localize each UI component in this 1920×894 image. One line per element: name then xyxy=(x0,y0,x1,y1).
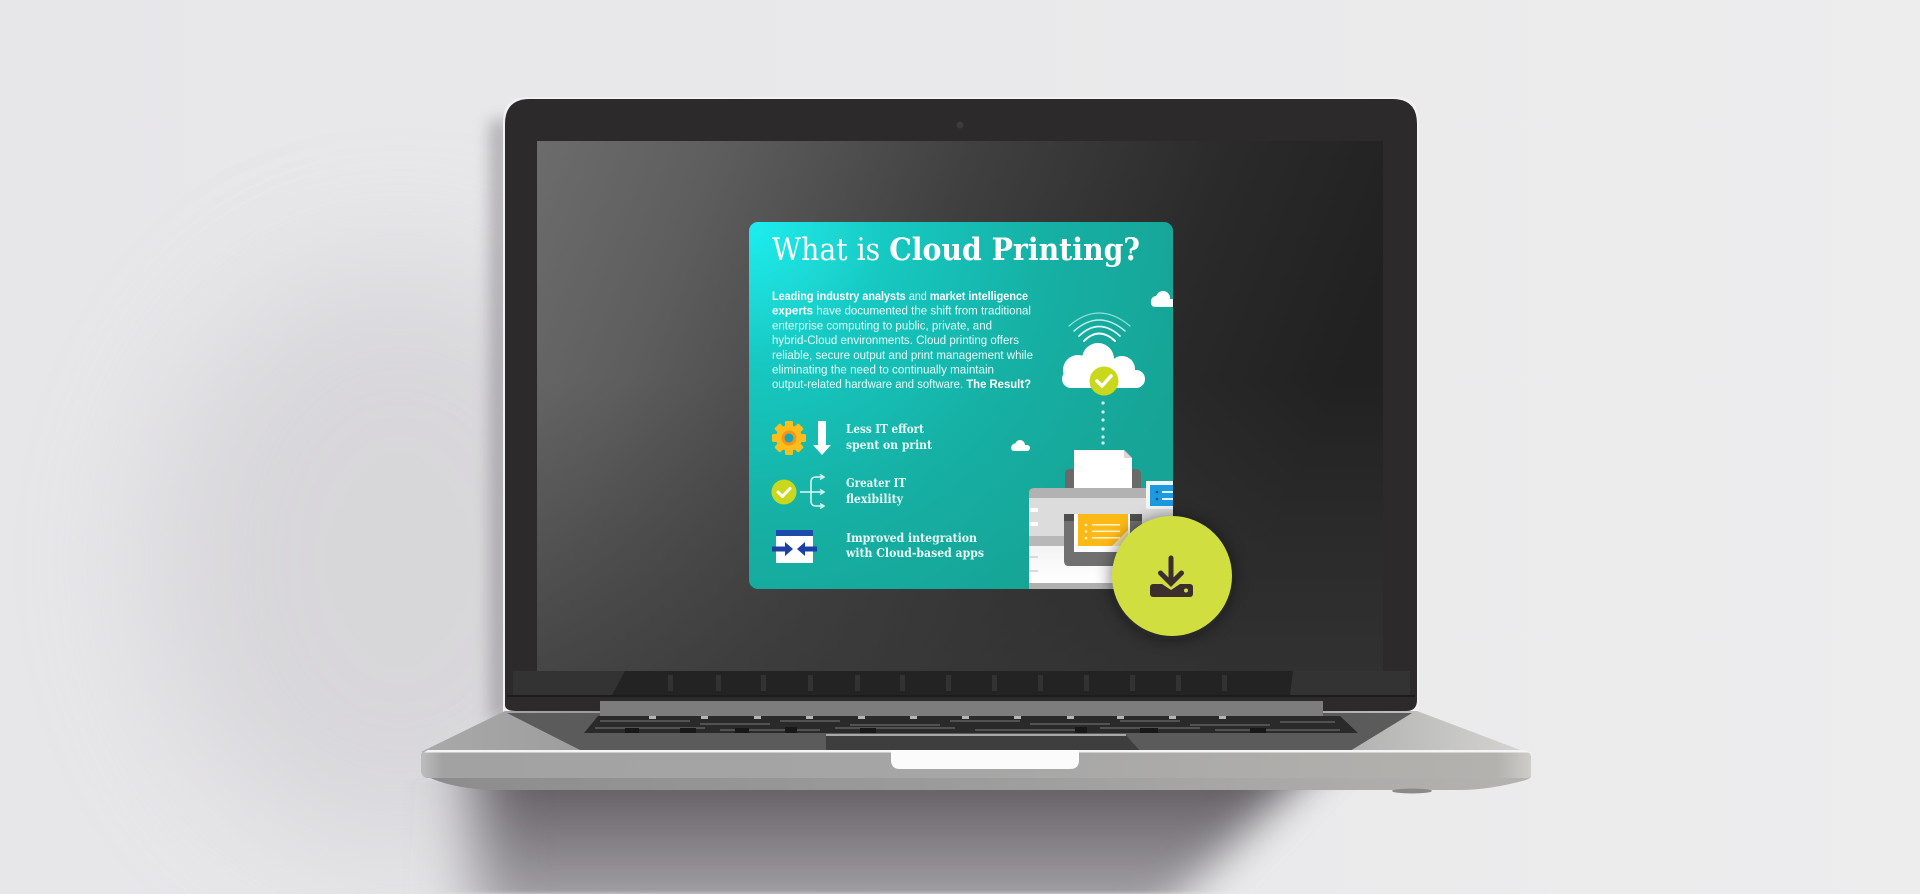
laptop mockup scene xyxy=(120,97,1531,894)
icon: branching arrows xyxy=(800,474,824,508)
webcam xyxy=(956,122,964,128)
paper in tray xyxy=(1074,450,1132,488)
label: flexibility xyxy=(846,491,904,506)
deck xyxy=(421,711,1531,754)
hinge strip xyxy=(600,701,1323,716)
icon: down arrow xyxy=(813,421,831,455)
shadow under laptop xyxy=(475,120,1300,894)
icon: gear xyxy=(772,421,806,455)
benefit: greater flexibility xyxy=(772,474,907,508)
front edge xyxy=(421,750,1531,790)
intro paragraph: experts have documented the shift from traditional xyxy=(772,304,1031,318)
laptop lid xyxy=(503,97,1419,712)
label xyxy=(845,530,984,560)
intro paragraph: output-related hardware and software. The Result? xyxy=(772,377,1031,391)
trackpad notch xyxy=(891,750,1079,769)
intro paragraph: eliminating the need to continually maintain xyxy=(772,362,994,376)
bezel reflection xyxy=(507,671,1415,697)
label: spent on print xyxy=(846,437,932,452)
intro paragraph: hybrid-Cloud environments. Cloud printing offers xyxy=(772,333,1019,347)
icon: printer xyxy=(1029,450,1180,589)
output slot xyxy=(1064,521,1142,566)
title: What is Cloud Printing? xyxy=(772,232,1140,268)
card background xyxy=(749,222,1173,589)
icon: wifi arcs xyxy=(1069,313,1130,341)
button shadow xyxy=(1111,517,1233,639)
blue tag xyxy=(1146,481,1173,509)
button circle xyxy=(1112,516,1232,636)
benefit: cloud integration xyxy=(772,530,984,563)
download button xyxy=(1111,516,1233,639)
label: Less IT effort xyxy=(846,421,924,436)
icon: download into tray xyxy=(1150,558,1193,597)
laptop base xyxy=(421,701,1531,794)
printer body xyxy=(1029,488,1146,498)
keyboard well xyxy=(507,713,1412,751)
laptop xyxy=(421,97,1531,794)
icon: app window with arrows xyxy=(772,530,817,563)
icon: small cloud middle xyxy=(1011,440,1030,451)
screen xyxy=(537,141,1383,671)
label: Greater IT xyxy=(846,475,907,490)
back tray xyxy=(1065,469,1141,488)
trackpad xyxy=(826,734,1140,751)
laptop foot xyxy=(1392,788,1432,794)
label xyxy=(846,421,932,452)
intro paragraph: Leading industry analysts and market intelligence xyxy=(772,289,1028,303)
icon: main cloud xyxy=(1062,343,1145,396)
dotted connector xyxy=(1101,401,1105,445)
label: with Cloud-based apps xyxy=(845,545,984,560)
icon: small cloud top right xyxy=(1151,291,1173,307)
intro paragraph: enterprise computing to public, private, and xyxy=(772,318,992,332)
printed page xyxy=(1074,514,1130,552)
infographic card xyxy=(749,222,1181,589)
keyboard xyxy=(584,716,1358,733)
check badge xyxy=(1090,366,1118,396)
intro paragraph xyxy=(772,289,1033,391)
panel buttons xyxy=(1029,508,1038,526)
intro paragraph: reliable, secure output and print management while xyxy=(772,348,1033,362)
label xyxy=(846,475,907,506)
icon: check badge xyxy=(772,480,796,504)
label: Improved integration xyxy=(846,530,977,545)
benefit: less IT effort xyxy=(772,421,932,455)
